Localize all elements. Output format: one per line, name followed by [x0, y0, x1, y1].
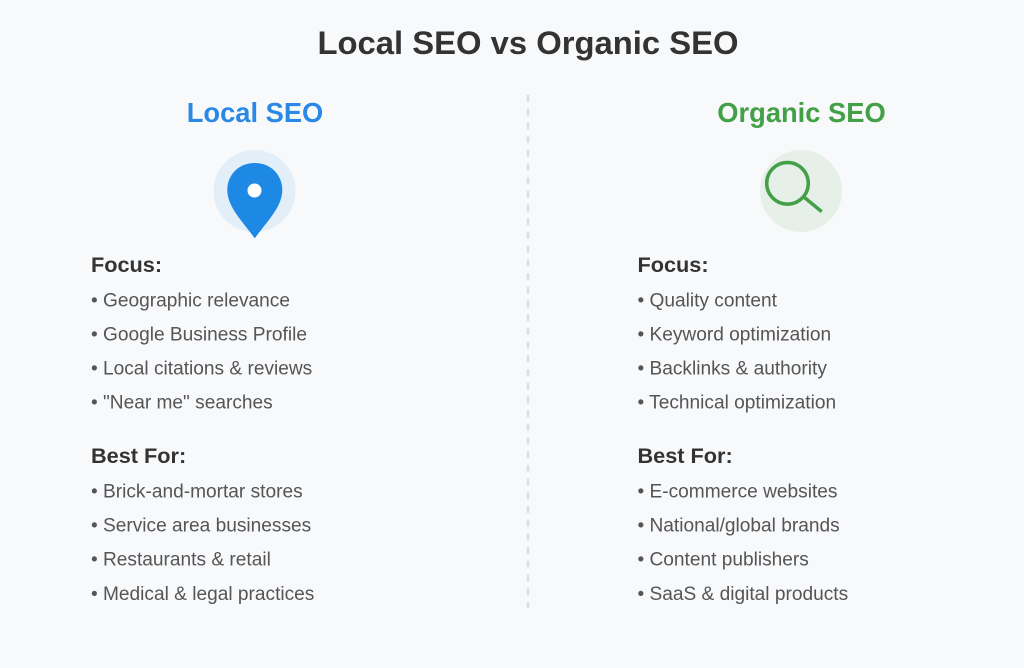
best for list: • Brick-and-mortar stores [91, 482, 303, 502]
best for list: Best For: [638, 443, 733, 468]
title: Local SEO vs Organic SEO [317, 24, 739, 61]
focus list: • Quality content [638, 290, 778, 312]
best for list: • National/global brands [638, 516, 840, 536]
best for list: • Service area businesses [91, 516, 311, 536]
icon: location pin [214, 150, 296, 238]
best for list: • Content publishers [638, 550, 809, 570]
best for list: Best For: [91, 443, 186, 468]
panel: Organic SEO [638, 97, 886, 605]
icon: magnifying glass [760, 150, 842, 232]
focus list [91, 252, 312, 414]
best for list: • E-commerce websites [638, 482, 837, 502]
focus list: Focus: [638, 252, 709, 277]
best for list [638, 443, 848, 605]
focus list: • Geographic relevance [91, 290, 290, 312]
focus list: • "Near me" searches [91, 392, 273, 414]
focus list [638, 252, 836, 414]
focus list: • Keyword optimization [638, 324, 831, 346]
best for list [91, 443, 314, 605]
best for list: • SaaS & digital products [638, 584, 848, 605]
heading: Organic SEO: Organic SEO [717, 97, 886, 128]
heading: Local SEO: Local SEO [187, 97, 323, 128]
best for list: • Medical & legal practices [91, 584, 314, 605]
panel: Local SEO [91, 97, 323, 605]
focus list: • Google Business Profile [91, 324, 307, 346]
focus list: Focus: [91, 252, 162, 277]
best for list: • Restaurants & retail [91, 550, 271, 570]
focus list: • Backlinks & authority [638, 358, 827, 380]
focus list: • Local citations & reviews [91, 358, 312, 380]
focus list: • Technical optimization [638, 392, 836, 414]
